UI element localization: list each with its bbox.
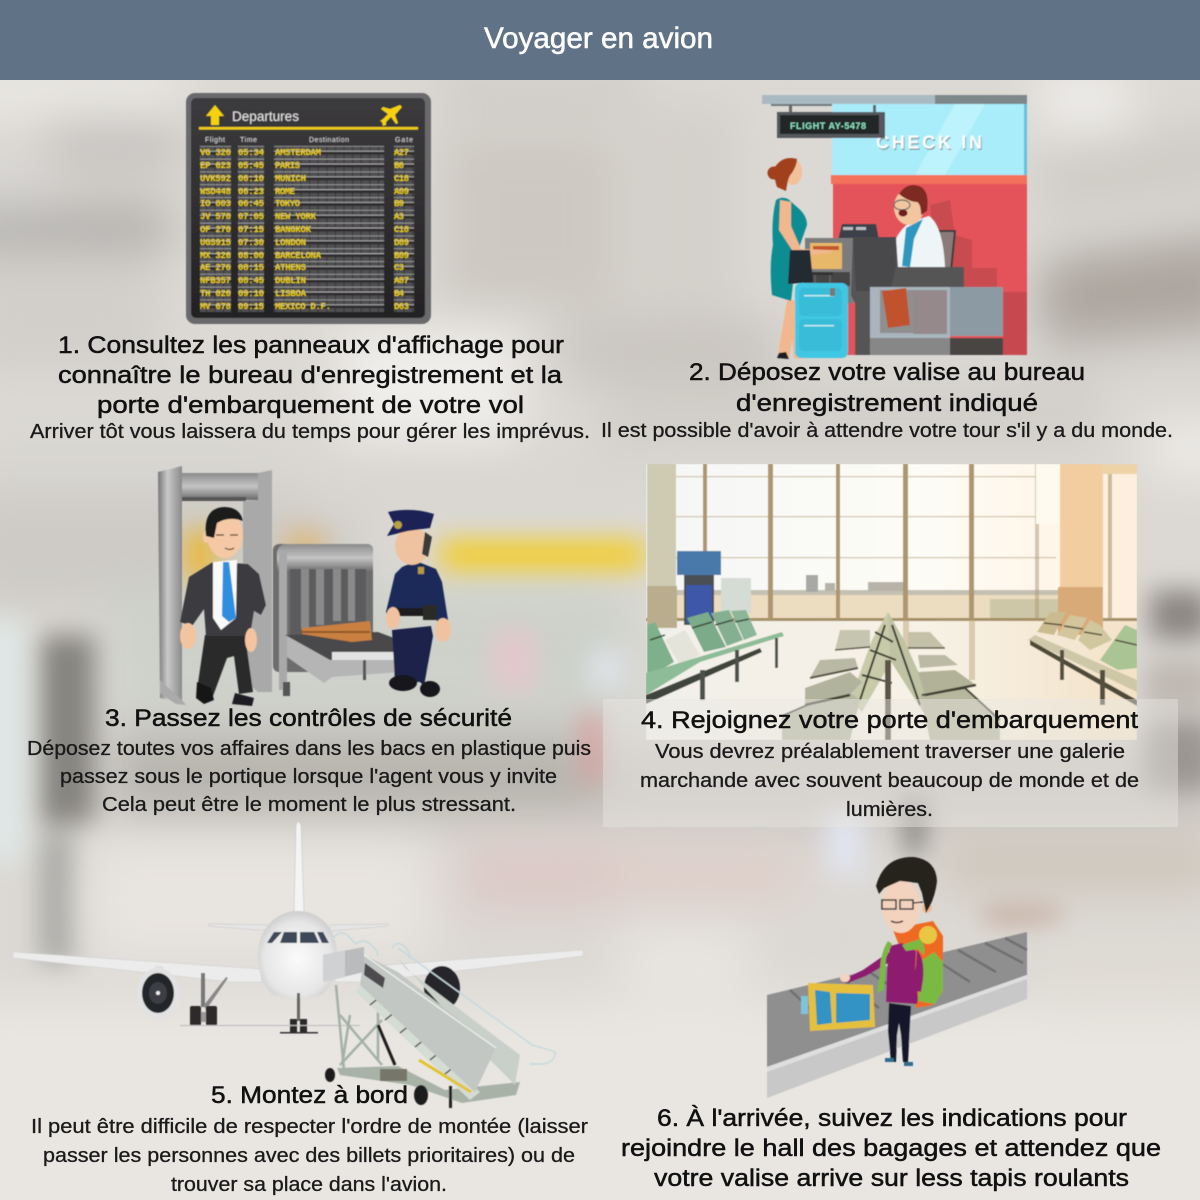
fuselage — [258, 911, 337, 998]
step 1 text: 1. Consultez les panneaux d'affichage pour — [58, 332, 564, 359]
column headings: Time — [240, 137, 257, 144]
flight times and destinations: MUNICH — [275, 174, 306, 184]
flight times and destinations: JV 578 — [200, 212, 231, 222]
baggage counter — [870, 287, 1003, 355]
flight times and destinations: EP 623 — [200, 161, 231, 171]
flight times and destinations: C3 — [394, 263, 404, 273]
paper and bag — [810, 243, 842, 269]
CHECK IN sign: CHECK IN — [876, 132, 982, 152]
panel: step 4 translucent caption — [603, 699, 1178, 827]
flight times and destinations: BANGKOK — [275, 225, 312, 235]
flight times and destinations: C18 — [394, 225, 409, 235]
flight times and destinations: A3 — [394, 212, 404, 222]
column headings — [205, 137, 413, 144]
flight times and destinations: 05:45 — [238, 161, 264, 171]
step 2 text — [601, 359, 1173, 442]
printer — [838, 224, 879, 240]
flight times and destinations: D63 — [394, 302, 409, 312]
icon: up arrow — [206, 105, 224, 125]
runway outside — [676, 594, 1058, 619]
flight times and destinations: UVK592 — [200, 174, 231, 184]
flight times and destinations: A09 — [394, 187, 409, 197]
step 6 text — [621, 1105, 1161, 1192]
flight times and destinations: B09 — [394, 251, 409, 261]
flight times and destinations: 06:23 — [238, 187, 264, 197]
desk — [805, 238, 855, 303]
flight times and destinations: MX 326 — [200, 251, 231, 261]
reflections — [902, 620, 910, 650]
image: departures board — [186, 93, 431, 324]
woman — [768, 158, 832, 359]
step 5 text: Il peut être difficile de respecter l'ordre de montée (laisser — [31, 1116, 588, 1138]
image: traveller at baggage carousel — [767, 857, 1027, 1098]
center seats — [782, 612, 1000, 740]
stair wheels and base — [325, 1025, 520, 1108]
title: Voyager en avion — [484, 22, 713, 55]
board title: Departures — [232, 108, 299, 124]
flight times and destinations: NEW YORK — [275, 212, 317, 222]
landing gear — [180, 973, 360, 1034]
flight times and destinations: IO 803 — [200, 199, 231, 209]
step 4 text: lumières. — [846, 799, 933, 821]
flight times and destinations: MEXICO D.F. — [275, 302, 331, 312]
flight times and destinations: D89 — [394, 238, 409, 248]
yellow suitcase — [801, 983, 875, 1031]
traveller — [180, 507, 266, 706]
flight times and destinations: A87 — [394, 276, 409, 286]
flight times and destinations: OF 270 — [200, 225, 231, 235]
image: check-in desk — [762, 95, 1027, 359]
flap cell rows — [200, 146, 414, 312]
floor — [646, 619, 1137, 740]
flight times and destinations: LISBOA — [275, 289, 307, 299]
flight times and destinations: NFB357 — [200, 276, 231, 286]
CHECK IN sign: CHECK IN — [877, 134, 983, 154]
pillars — [647, 464, 676, 596]
flight times and destinations: TOKYO — [275, 199, 301, 209]
flight times and destinations: VG 326 — [200, 148, 231, 158]
flight times and destinations: 07:30 — [238, 238, 264, 248]
left engine — [137, 966, 179, 1020]
flight times and destinations: ATHENS — [275, 263, 307, 273]
flight sign: FLIGHT AY-5478 — [790, 121, 866, 131]
step 2 text: Il est possible d'avoir à attendre votre tour s'il y a du monde. — [601, 420, 1173, 442]
security officer — [386, 510, 451, 697]
flight times and destinations: 06:10 — [238, 174, 264, 184]
step 6 text: 6. À l'arrivée, suivez les indications pour — [657, 1105, 1127, 1132]
tail — [294, 821, 304, 912]
x-ray scanner — [273, 544, 428, 696]
header bar — [0, 0, 1200, 80]
flight times and destinations: AMSTERDAM — [275, 148, 321, 158]
flight times and destinations: 08:15 — [238, 263, 264, 273]
red wall — [831, 175, 1027, 184]
flight times and destinations: DUBLIN — [275, 276, 306, 286]
step 3 text: Cela peut être le moment le plus stressant. — [102, 794, 516, 816]
step 2 text: 2. Déposez votre valise au bureau — [689, 359, 1085, 386]
flight times and destinations: 05:34 — [238, 148, 265, 158]
step 4 text: marchande avec souvent beaucoup de monde et de — [640, 770, 1139, 792]
step 1 text: connaître le bureau d'enregistrement et la — [58, 362, 563, 389]
clerk chair — [935, 231, 955, 281]
flight times and destinations: LONDON — [275, 238, 306, 248]
step 4 text — [640, 707, 1139, 821]
stair frame — [336, 985, 382, 1070]
step 1 text — [30, 332, 590, 443]
step 3 text: passez sous le portique lorsque l'agent vous y invite — [60, 766, 557, 788]
step 3 text: 3. Passez les contrôles de sécurité — [105, 705, 512, 732]
flight times and destinations: B9 — [394, 199, 404, 209]
flight times and destinations: MV 678 — [200, 302, 231, 312]
flight times and destinations: B6 — [394, 161, 404, 171]
step 6 text: rejoindre le hall des bagages et attendez que — [621, 1135, 1161, 1162]
clerk — [889, 185, 945, 267]
flight times and destinations — [200, 148, 409, 312]
wings — [13, 952, 262, 982]
flight times and destinations: 09:15 — [238, 302, 264, 312]
flight times and destinations: PARIS — [275, 161, 301, 171]
column headings: Flight — [205, 137, 225, 144]
flight times and destinations: C18 — [394, 174, 409, 184]
step 3 text: Déposez toutes vos affaires dans les bacs en plastique puis — [27, 738, 591, 760]
ceiling bar — [762, 95, 935, 104]
column headings: Gate — [395, 137, 413, 144]
step 2 text: d'enregistrement indiqué — [736, 390, 1038, 417]
right engine — [424, 966, 460, 1010]
flight times and destinations: A27 — [394, 148, 409, 158]
flight times and destinations: ROME — [275, 187, 296, 197]
flight times and destinations: 08:00 — [238, 251, 264, 261]
flight sign — [777, 105, 885, 138]
step 4 text: 4. Rejoignez votre porte d'embarquement — [641, 707, 1138, 734]
flight times and destinations: 07:15 — [238, 225, 264, 235]
metal detector portal — [158, 466, 272, 705]
step 5 text: trouver sa place dans l'avion. — [171, 1174, 447, 1196]
step 1 text: porte d'embarquement de votre vol — [97, 392, 524, 419]
luggage tray — [302, 621, 372, 642]
flight times and destinations: TH 026 — [200, 289, 231, 299]
flight times and destinations: 09:10 — [238, 289, 264, 299]
step 6 text: votre valise arrive sur less tapis roulants — [654, 1165, 1129, 1192]
flight times and destinations: B4 — [394, 289, 405, 299]
photo: boarding gate lounge — [646, 464, 1137, 740]
step 5 text — [31, 1082, 588, 1196]
image: airplane and boarding stairs — [13, 821, 583, 1108]
flight times and destinations: 08:45 — [238, 276, 264, 286]
image: security checkpoint — [158, 466, 451, 706]
window frames — [676, 464, 1112, 619]
step 5 text: 5. Montez à bord — [211, 1082, 408, 1109]
column headings: Destination — [309, 137, 349, 144]
conveyor — [285, 632, 426, 660]
stair body — [323, 933, 555, 1100]
step 1 text: Arriver tôt vous laissera du temps pour gérer les imprévus. — [30, 421, 590, 443]
glass wall — [832, 104, 1027, 175]
traveller — [840, 857, 943, 1066]
left seats — [646, 610, 784, 704]
flight times and destinations: UGS915 — [200, 238, 231, 248]
step 5 text: passer les personnes avec des billets prioritaires) ou de — [43, 1145, 575, 1167]
step 4 text: Vous devrez préalablement traverser une galerie — [655, 741, 1125, 763]
baggage belt — [767, 932, 1027, 1098]
flight times and destinations: 07:05 — [238, 212, 264, 222]
flight times and destinations: 06:45 — [238, 199, 264, 209]
icon: plane — [380, 105, 402, 126]
cockpit windows — [267, 932, 329, 943]
step 3 text — [27, 705, 591, 816]
info screen — [677, 551, 721, 575]
flight times and destinations: BARCELONA — [275, 251, 322, 261]
suitcase — [795, 272, 848, 358]
flight times and destinations: WSD448 — [200, 187, 231, 197]
right seats — [1028, 612, 1137, 706]
flight times and destinations: AE 276 — [200, 263, 231, 273]
